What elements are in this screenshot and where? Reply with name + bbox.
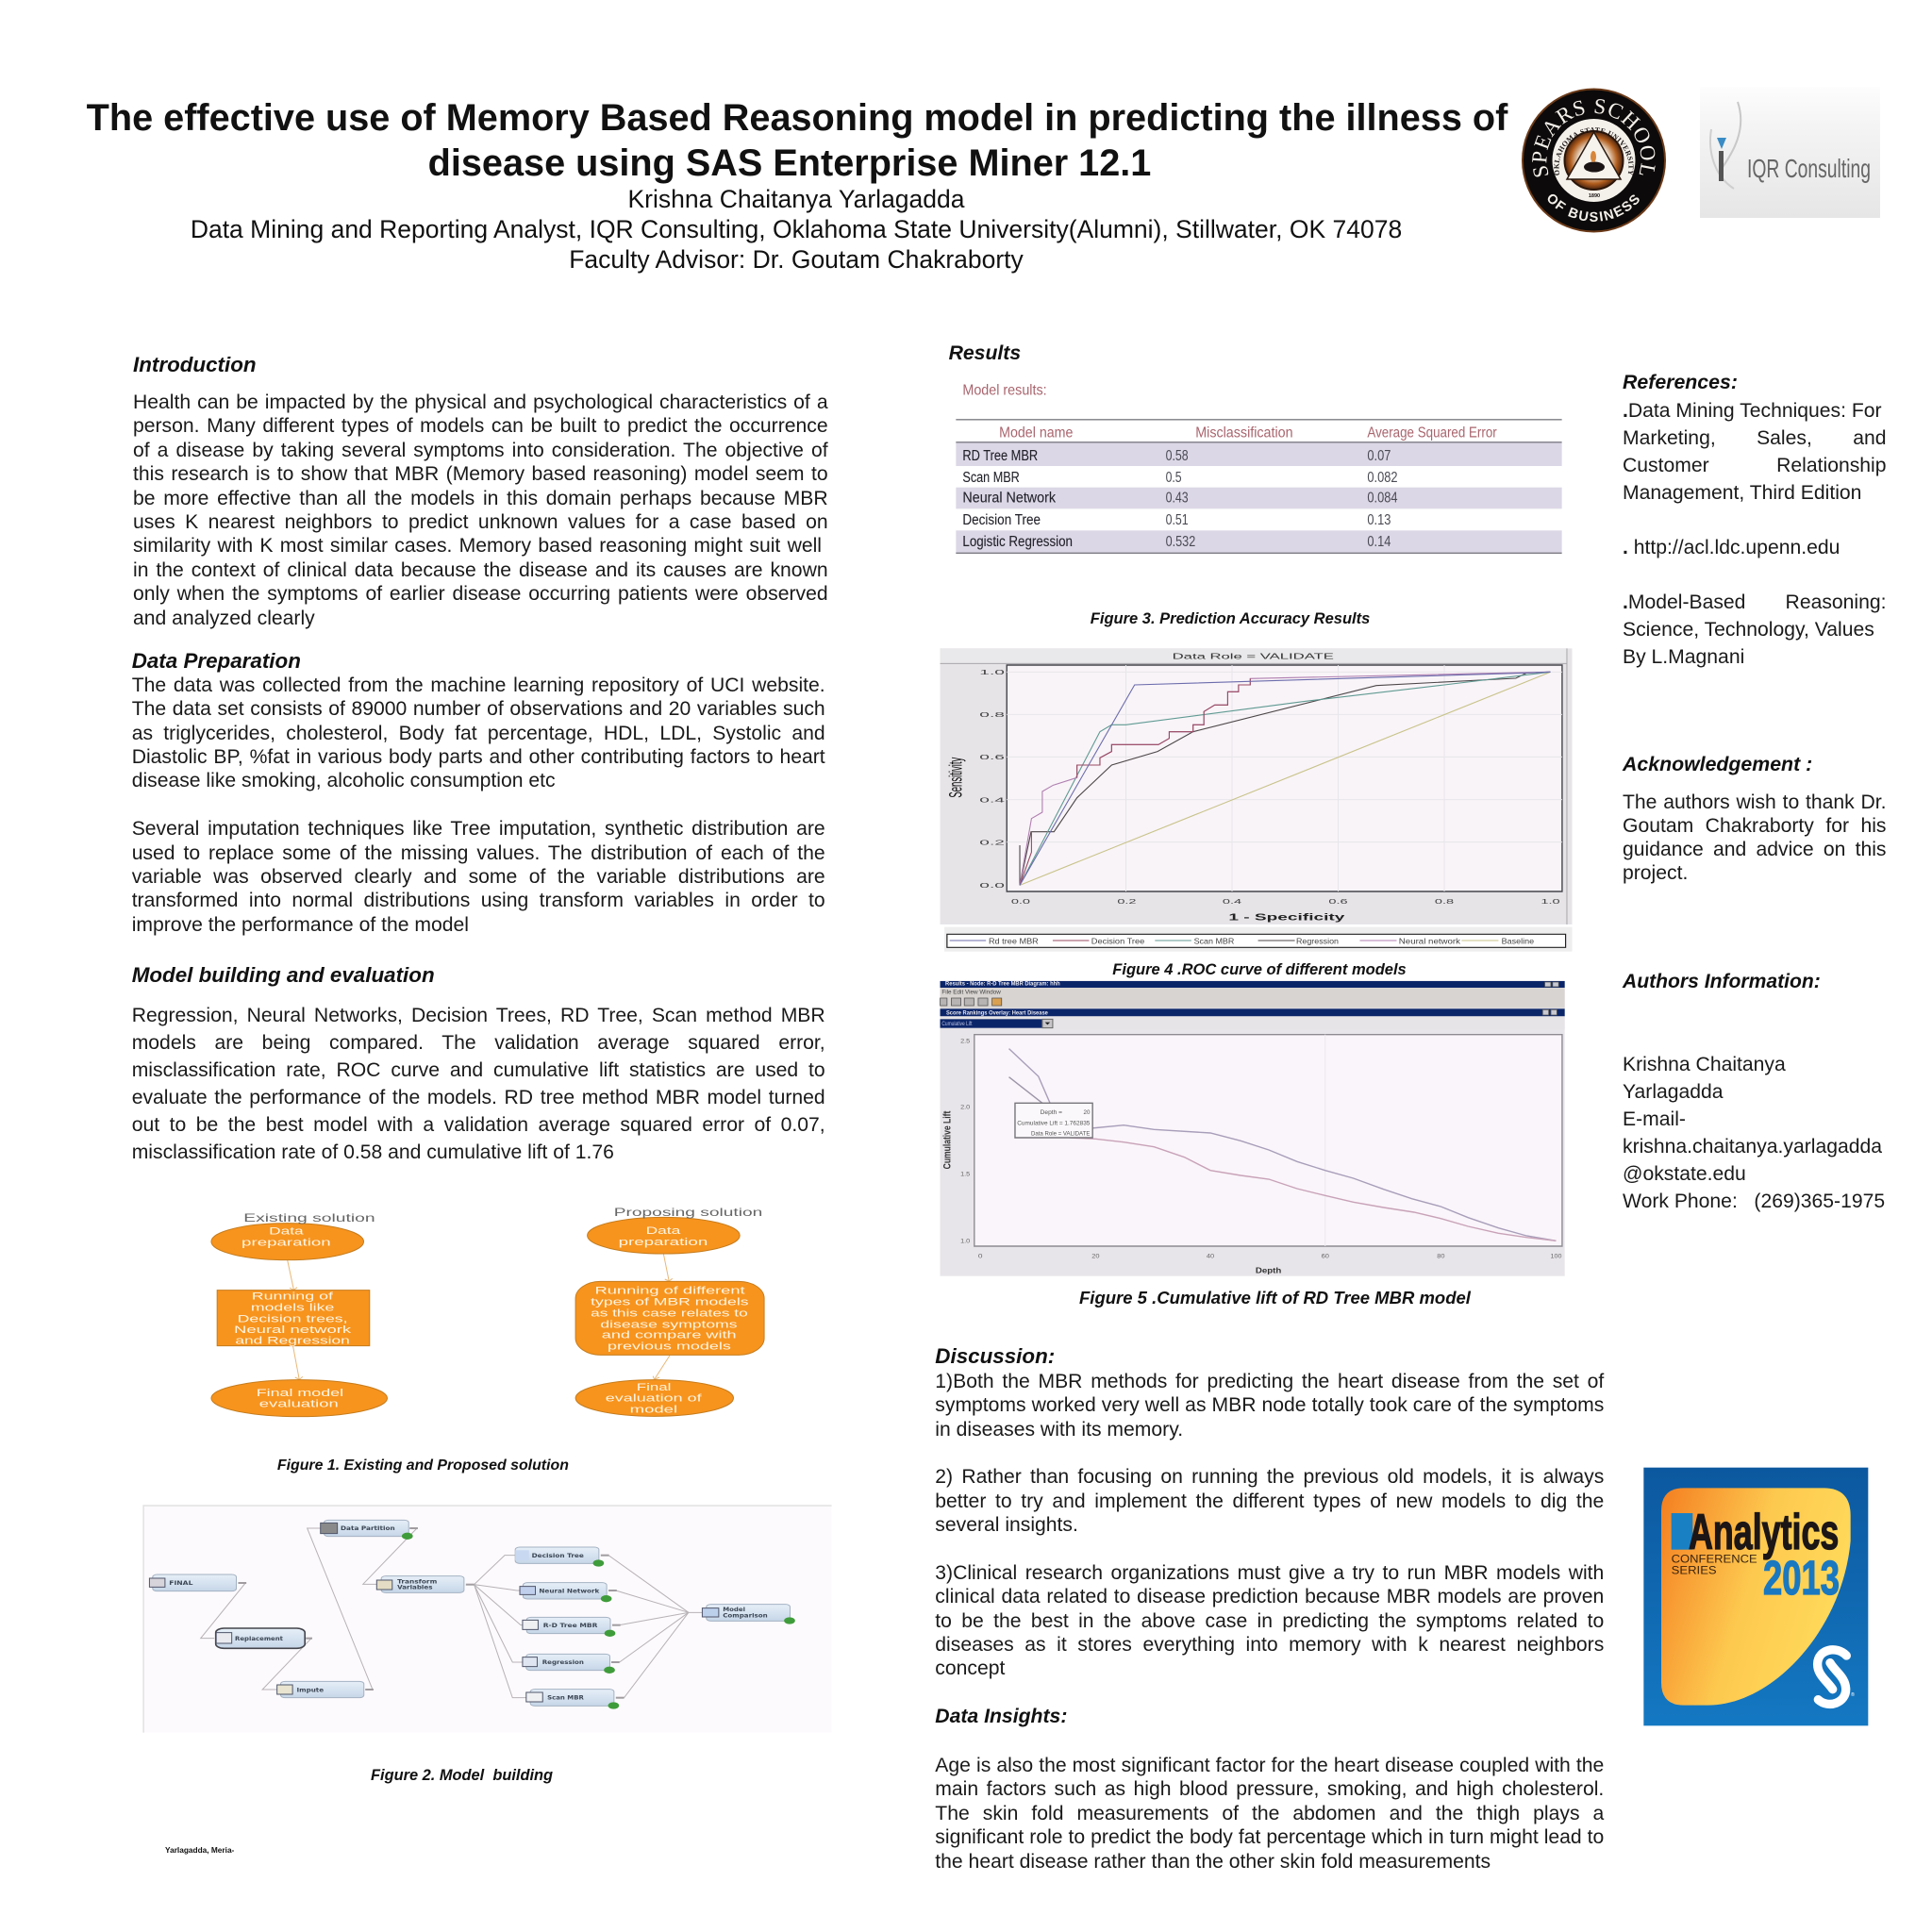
text block: introduction: person. Many different types of models can be built to predict the occurrence xyxy=(133,415,828,437)
flowchart: existing and proposed solution: Existing solution xyxy=(243,1212,375,1224)
table: model results: 0.13 xyxy=(1367,511,1391,527)
text block: introduction: only when the symptoms of earlier disease occurring patients were observed xyxy=(133,583,828,605)
flowchart: existing and proposed solution: model xyxy=(630,1404,677,1415)
chart: ROC curve: 1 - Specificity xyxy=(1228,912,1345,923)
logo: IQR Consulting xyxy=(1700,102,1880,218)
chart: cumulative lift: 0 xyxy=(978,1253,983,1259)
chart legend: Neural network xyxy=(1399,938,1461,946)
text block: data preparation: The data was collected from the machine learning repository of UCI website. xyxy=(132,675,825,696)
chart: ROC curve: 0.0 xyxy=(1011,897,1030,906)
flowchart: existing and proposed solution: evaluation of xyxy=(606,1392,702,1404)
text block: data preparation: used to replace some of the missing values. The distribution of each of the xyxy=(132,842,825,864)
chart: ROC curve: 0.4 xyxy=(1223,897,1241,906)
logo: Analytics Conference Series 2013: Analytics xyxy=(1689,1505,1839,1560)
chart: cumulative lift: 1.0 xyxy=(960,1238,971,1244)
chart: cumulative lift: Cumulative Lift xyxy=(941,1110,954,1169)
tooltip: Depth = xyxy=(1041,1108,1062,1116)
logo: Spears School of Business seal: OKLAHOMA STATE UNIVERSITY xyxy=(1554,127,1634,175)
text block: introduction xyxy=(133,391,828,629)
author and affiliation block: Faculty Advisor: Dr. Goutam Chakraborty xyxy=(569,245,1024,274)
flowchart: existing and proposed solution: disease symptoms xyxy=(600,1318,738,1330)
text block: data preparation: variable was observed clearly and some of the variable distributions are xyxy=(132,866,825,888)
chart: ROC curve: 0.6 xyxy=(979,753,1005,761)
chart: cumulative lift: 2.0 xyxy=(960,1104,971,1110)
chart: ROC curve: Data Role = VALIDATE xyxy=(1173,653,1334,661)
text block: acknowledgement: guidance and advice on this xyxy=(1623,839,1887,860)
chart: ROC curve: 0.0 xyxy=(979,881,1005,890)
chart legend xyxy=(944,927,1572,952)
text block: discussion: to be the best in the above case in predicting the symptoms related to xyxy=(935,1610,1604,1632)
chart: ROC curve: 0.4 xyxy=(979,796,1005,804)
logo: Analytics Conference Series 2013 xyxy=(1643,1468,1868,1726)
flowchart: existing and proposed solution: models like xyxy=(251,1301,334,1313)
flowchart: existing and proposed solution: preparation xyxy=(242,1236,331,1248)
text block: data insights: significant role to predict the body fat percentage which in turn might lead to xyxy=(935,1826,1604,1848)
diagram: model building flow: R-D Tree MBR xyxy=(543,1622,597,1629)
text block: references: By L.Magnani xyxy=(1623,646,1744,668)
text block: discussion: 2) Rather than focusing on running the previous old models, it is always xyxy=(935,1466,1604,1488)
chart: cumulative lift: 20 xyxy=(1091,1253,1100,1259)
flowchart: existing and proposed solution: and compare with xyxy=(602,1329,737,1341)
text block: discussion: clinical data related to disease prediction because MBR models are proven xyxy=(935,1586,1604,1607)
diagram: model building flow: Transform xyxy=(397,1578,437,1585)
text block: references: Management, Third Edition xyxy=(1623,482,1861,504)
flowchart: existing and proposed solution: previous models xyxy=(608,1340,732,1352)
text block: introduction: Health can be impacted by the physical and psychological characteristics of a xyxy=(133,391,828,413)
table: model results: Neural Network xyxy=(962,490,1056,506)
text block: data insights: main factors such as high blood pressure, smoking, and high cholesterol. xyxy=(935,1778,1604,1800)
flowchart: existing and proposed solution: Proposing solution xyxy=(614,1207,762,1219)
flowchart: existing and proposed solution: Data xyxy=(646,1224,681,1237)
author and affiliation block: Data Mining and Reporting Analyst, IQR Consulting, Oklahoma State University(Alumni), Stillwater, OK 74078 xyxy=(191,215,1402,243)
text block: authors information: krishna.chaitanya.yarlagadda xyxy=(1623,1136,1882,1158)
text block: data insights: Age is also the most significant factor for the heart disease coupled with the xyxy=(935,1755,1604,1776)
caption: figure 4: Figure 4 .ROC curve of different models xyxy=(1112,961,1407,978)
table: model results: 0.082 xyxy=(1367,469,1397,485)
text block: discussion: in diseases with its memory. xyxy=(935,1419,1183,1441)
flowchart: existing and proposed solution: Running of xyxy=(252,1291,333,1302)
diagram: model building flow: Data Partition xyxy=(341,1524,395,1532)
table: model results: 0.14 xyxy=(1367,533,1391,549)
flowchart: existing and proposed solution: Final model xyxy=(257,1387,343,1399)
text block: data preparation: Several imputation techniques like Tree imputation, synthetic distribution are xyxy=(132,818,825,840)
diagram: model building flow: Variables xyxy=(397,1584,433,1591)
logo: Spears School of Business seal: 1890 xyxy=(1589,193,1600,199)
author and affiliation block: Krishna Chaitanya Yarlagadda xyxy=(627,185,964,213)
text block: acknowledgement: The authors wish to thank Dr. xyxy=(1623,791,1887,813)
caption: figure 3: Figure 3. Prediction Accuracy Results xyxy=(1091,609,1370,626)
title xyxy=(87,97,1507,183)
chart: ROC curve: 0.8 xyxy=(979,710,1005,719)
text block: introduction: this research is to show that MBR (Memory based reasoning) model seem to xyxy=(133,463,828,485)
chart legend: Rd tree MBR xyxy=(989,938,1039,946)
title: disease using SAS Enterprise Miner 12.1 xyxy=(428,142,1151,183)
diagram: model building flow: FINAL xyxy=(169,1579,192,1587)
table: model results xyxy=(956,381,1562,554)
table: model results: RD Tree MBR xyxy=(962,447,1038,463)
heading: References: References: xyxy=(1623,371,1738,393)
text block: data preparation: Diastolic BP, %fat in various body parts and other contributing factors to heart xyxy=(132,746,825,768)
text block: data preparation: improve the performance of the model xyxy=(132,914,469,936)
chart: cumulative lift: 2.5 xyxy=(960,1038,971,1044)
text block: discussion: better to try and implement the different types of new models to dig the xyxy=(935,1491,1604,1512)
heading: Introduction: Introduction xyxy=(133,353,257,376)
chart: cumulative lift: Depth xyxy=(1256,1267,1281,1275)
logo: Analytics Conference Series 2013: ® xyxy=(1851,1691,1855,1698)
text block: data insights xyxy=(935,1755,1604,1873)
flowchart: existing and proposed solution: Running of different xyxy=(595,1285,745,1296)
diagram: model building flow: Comparison xyxy=(723,1612,768,1619)
chart: ROC curve: 0.6 xyxy=(1328,897,1348,906)
table: model results: 0.532 xyxy=(1166,533,1195,549)
text block: references: Customer Relationship xyxy=(1623,455,1887,476)
text block: introduction: in the context of clinical data because the disease and its causes are known xyxy=(133,559,828,581)
text block: discussion xyxy=(935,1371,1604,1679)
flowchart: existing and proposed solution: preparation xyxy=(619,1236,708,1248)
flowchart: existing and proposed solution: types of MBR models xyxy=(591,1295,749,1307)
chart legend: Decision Tree xyxy=(1091,938,1144,946)
diagram: model building flow: Replacement xyxy=(235,1635,283,1642)
tooltip: Cumulative Lift = 1.762835 xyxy=(1017,1120,1091,1126)
table: model results: Average Squared Error xyxy=(1367,424,1497,441)
text block: introduction: be more effective than all the models in this domain perhaps because MBR xyxy=(133,488,828,509)
flowchart: existing and proposed solution: and Regression xyxy=(235,1335,350,1346)
logo: Spears School of Business seal: SPEARS SCHOOL xyxy=(1532,99,1656,177)
title: The effective use of Memory Based Reasoning model in predicting the illness of xyxy=(87,97,1507,139)
logo: Analytics Conference Series 2013: SERIES xyxy=(1672,1564,1717,1577)
logo: Spears School of Business seal: OF BUSINESS xyxy=(1547,194,1640,222)
chart: ROC curve: 0.8 xyxy=(1435,897,1454,906)
text block: authors information: E-mail- xyxy=(1623,1108,1686,1130)
diagram: model building flow: Decision Tree xyxy=(532,1552,584,1559)
diagram: model building flow: Scan MBR xyxy=(547,1694,584,1701)
flowchart: existing and proposed solution: Data xyxy=(269,1224,305,1237)
text block: references: .Data Mining Techniques: For xyxy=(1623,400,1882,422)
table: model results: Scan MBR xyxy=(962,469,1020,485)
diagram: model building flow: Regression xyxy=(542,1658,584,1666)
text block: introduction: and analyzed clearly xyxy=(133,608,315,629)
text block: authors information xyxy=(1623,1054,1885,1212)
table: model results: 0.07 xyxy=(1367,447,1391,463)
chart: cumulative lift: 100 xyxy=(1551,1253,1562,1259)
chart: ROC curve: 1.0 xyxy=(979,668,1005,676)
chart: ROC curve: 0.2 xyxy=(1117,897,1137,906)
heading: Acknowledgement: Acknowledgement : xyxy=(1623,753,1812,775)
text block: model building: out to be the best model with a validation average squared error of 0.07, xyxy=(132,1114,825,1136)
table: model results: 0.58 xyxy=(1166,447,1189,463)
heading: Discussion: Discussion: xyxy=(935,1343,1055,1368)
heading: Model building and evaluation: Model building and evaluation xyxy=(132,963,435,987)
text block: references: . http://acl.ldc.upenn.edu xyxy=(1623,537,1840,558)
text block: acknowledgement: Goutam Chakraborty for his xyxy=(1623,815,1887,837)
chart: cumulative lift: Cumulative Lift xyxy=(941,1020,973,1027)
flowchart: existing and proposed solution: as this case relates to xyxy=(591,1307,748,1319)
text block: model building: models are being compared. The validation average squared error, xyxy=(132,1032,825,1054)
table: model results: Decision Tree xyxy=(962,511,1041,527)
table: model results: Logistic Regression xyxy=(962,533,1073,549)
heading: Data Insights: Data Insights: xyxy=(935,1706,1067,1727)
tooltip: 20 xyxy=(1084,1108,1091,1116)
chart: cumulative lift: Score Rankings Overlay: Heart Disease xyxy=(946,1009,1048,1016)
logo: Spears School of Business seal xyxy=(1522,89,1666,232)
flowchart: existing and proposed solution: Neural network xyxy=(234,1324,352,1336)
footer note: Yarlagadda, Meria- xyxy=(165,1845,234,1855)
chart: ROC curve xyxy=(940,648,1572,951)
text block: data insights: The skin fold measurements of the abdomen and the thigh plays a xyxy=(935,1803,1604,1824)
diagram: model building flow: Impute xyxy=(296,1687,324,1693)
text block: introduction: of a disease by taking several symptoms into consideration. The objective of xyxy=(133,440,828,461)
text block: discussion: concept xyxy=(935,1657,1005,1679)
text block: authors information: Krishna Chaitanya xyxy=(1623,1054,1786,1075)
heading: Data Preparation: Data Preparation xyxy=(132,649,301,673)
text block: discussion: several insights. xyxy=(935,1514,1078,1536)
diagram: model building flow: Model xyxy=(723,1606,745,1613)
text block: data insights: the heart disease rather than the other skin fold measurements xyxy=(935,1851,1491,1873)
text block: discussion: 1)Both the MBR methods for predicting the heart disease from the set of xyxy=(935,1371,1604,1392)
text block: model building: misclassification rate, ROC curve and cumulative lift statistics are used to xyxy=(132,1059,825,1081)
chart: cumulative lift: File Edit View Window xyxy=(941,989,1001,995)
chart: ROC curve: 0.2 xyxy=(979,839,1005,846)
text block: references: Marketing, Sales, and xyxy=(1623,427,1887,449)
chart: cumulative lift: 40 xyxy=(1207,1253,1215,1259)
chart: cumulative lift: 80 xyxy=(1437,1253,1445,1259)
diagram: model building flow: Neural Network xyxy=(539,1588,600,1594)
text block: discussion: diseases as it stores everything into memory with k nearest neighbors xyxy=(935,1634,1604,1656)
chart: ROC curve: Sensitivity xyxy=(945,757,966,798)
chart: cumulative lift: 60 xyxy=(1322,1253,1329,1259)
diagram: model building flow xyxy=(143,1505,832,1732)
text block: acknowledgement xyxy=(1623,791,1887,884)
text block: discussion: 3)Clinical research organizations must give a try to run MBR models with xyxy=(935,1562,1604,1584)
text block: authors information: Work Phone: (269)365-1975 xyxy=(1623,1191,1885,1212)
table: model results: 0.43 xyxy=(1166,490,1189,506)
flowchart: existing and proposed solution xyxy=(210,1207,765,1417)
text block: data preparation: disease like smoking, alcoholic consumption etc xyxy=(132,770,556,791)
flowchart: existing and proposed solution: evaluation xyxy=(259,1398,339,1409)
table: model results: Model results: xyxy=(962,381,1047,398)
logo: Analytics Conference Series 2013: 2013 xyxy=(1763,1551,1840,1605)
flowchart: existing and proposed solution: Final xyxy=(637,1381,672,1393)
text block: data preparation: The data set consists of 89000 number of observations and 20 variables such xyxy=(132,698,825,720)
text block: references: .Model-Based Reasoning: xyxy=(1623,591,1887,613)
text block: model building: misclassification rate of 0.58 and cumulative lift of 1.76 xyxy=(132,1141,614,1163)
caption: figure 5: Figure 5 .Cumulative lift of RD Tree MBR model xyxy=(1079,1288,1471,1307)
heading: Results: Results xyxy=(949,341,1021,364)
chart: cumulative lift xyxy=(940,980,1565,1276)
text block: data preparation: transformed into normal distributions using transform variables in order to xyxy=(132,890,825,911)
tooltip: Data Role = VALIDATE xyxy=(1031,1130,1090,1137)
caption: figure 1: Figure 1. Existing and Proposed solution xyxy=(277,1457,569,1474)
text block: data preparation xyxy=(132,675,825,936)
table: model results: 0.084 xyxy=(1367,490,1397,506)
text block: authors information: Yarlagadda xyxy=(1623,1081,1724,1103)
text block: acknowledgement: project. xyxy=(1623,862,1688,884)
table: model results: Model name xyxy=(999,424,1073,441)
text block: model building xyxy=(132,1004,825,1163)
table: model results: 0.5 xyxy=(1166,469,1182,485)
table: model results: 0.51 xyxy=(1166,511,1189,527)
text block: discussion: symptoms worked very well as MBR node totally took care of the symptoms xyxy=(935,1394,1604,1416)
tooltip xyxy=(1015,1103,1092,1138)
chart: cumulative lift: 1.5 xyxy=(960,1171,971,1177)
text block: authors information: @okstate.edu xyxy=(1623,1163,1746,1185)
text block: model building: evaluate the performance of the models. RD tree method MBR model turned xyxy=(132,1087,825,1108)
chart: cumulative lift: Results - Node: R-D Tree MBR Diagram: hhh xyxy=(945,980,1060,987)
text block: model building: Regression, Neural Networks, Decision Trees, RD Tree, Scan method MBR xyxy=(132,1004,825,1026)
chart legend: Scan MBR xyxy=(1194,938,1235,946)
text block: introduction: similarity with K most similar cases. Memory based reasoning might suit well xyxy=(133,535,822,557)
text block: references xyxy=(1623,400,1887,668)
text block: introduction: uses K nearest neighbors to predict unknown values for a case based on xyxy=(133,511,828,533)
caption: figure 2: Figure 2. Model building xyxy=(371,1766,553,1783)
chart: ROC curve: 1.0 xyxy=(1541,897,1560,906)
text block: references: Science, Technology, Values xyxy=(1623,619,1874,641)
heading: Authors Information: Authors Information: xyxy=(1623,971,1821,992)
logo: Analytics Conference Series 2013: CONFERENCE xyxy=(1672,1553,1757,1566)
chart legend: Baseline xyxy=(1502,938,1534,946)
text block: data preparation: as triglycerides, cholesterol, Body fat percentage, HDL, LDL, Systolic and xyxy=(132,723,825,744)
author and affiliation block xyxy=(191,185,1402,274)
table: model results: Misclassification xyxy=(1195,424,1293,441)
chart legend: Regression xyxy=(1296,938,1339,946)
flowchart: existing and proposed solution: Decision trees, xyxy=(238,1312,348,1324)
